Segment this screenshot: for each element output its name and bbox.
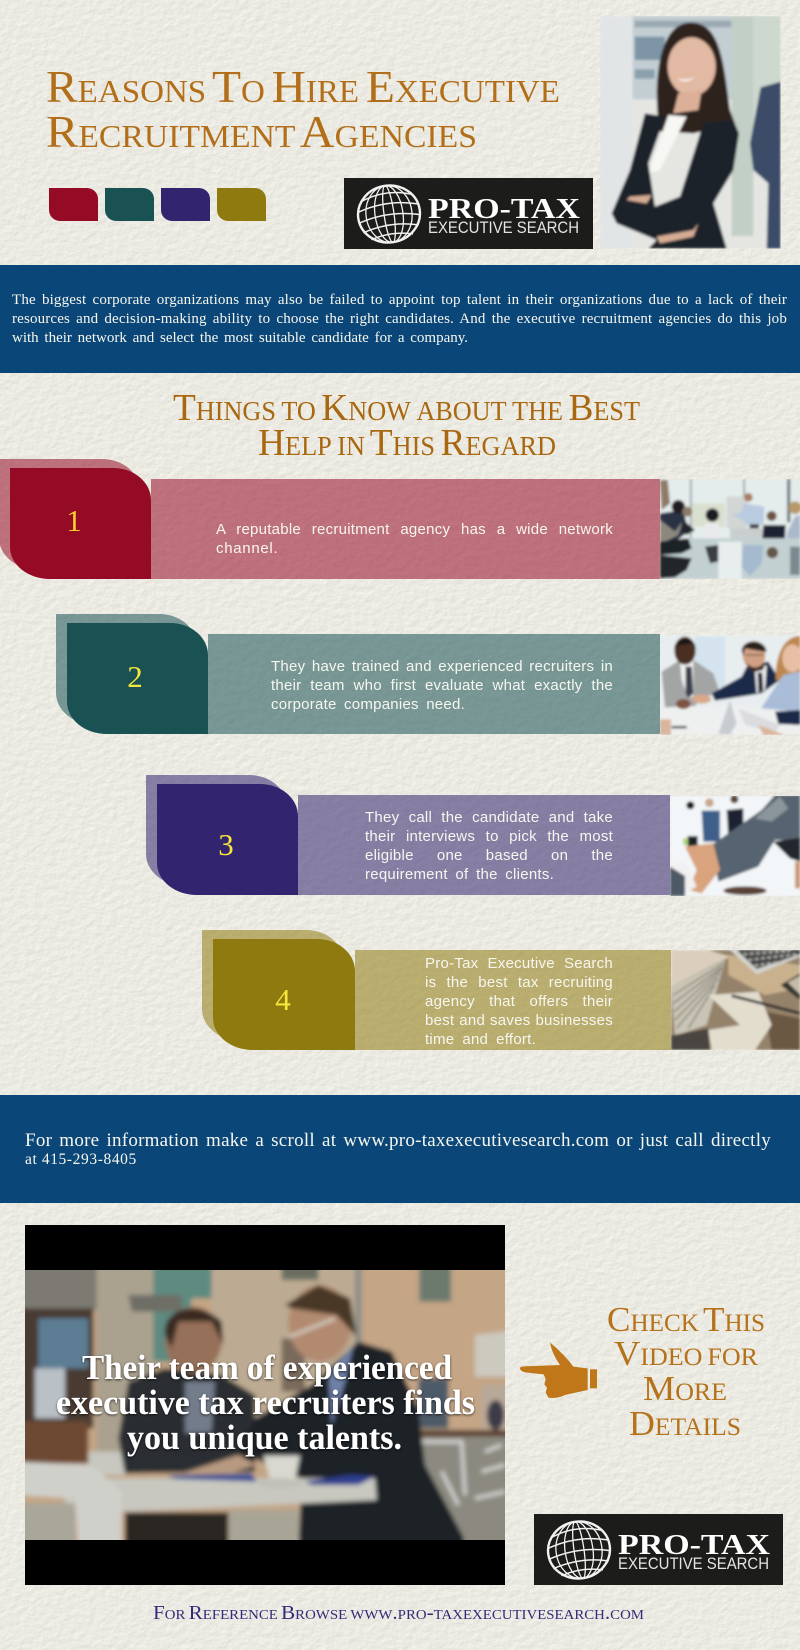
- row 3 text: eligible one based on the: [365, 847, 613, 864]
- row 1 text: channel.: [216, 540, 278, 557]
- title: [46, 61, 560, 157]
- intro text: resources and decision-making ability to choose the right candidates. And the executive recruitment agencies do this job: [12, 311, 787, 327]
- callout: check this video: Video for: [614, 1334, 758, 1373]
- row 4 text: [425, 955, 613, 1048]
- row 2 text: corporate companies need.: [271, 696, 465, 713]
- video still panel: [15, 1225, 515, 1585]
- row 2 panel: [56, 614, 660, 734]
- row 4 text: best and saves businesses: [425, 1012, 613, 1029]
- row 1 text: A reputable recruitment agency has a wide network: [216, 521, 613, 538]
- row 3 panel: [146, 775, 670, 895]
- intro text: with their network and select the most suitable candidate for a company.: [12, 330, 468, 346]
- logo: Pro-Tax Executive Search: [344, 178, 593, 249]
- title: Reasons To Hire Executive: [46, 61, 560, 112]
- row 3 text: [365, 809, 613, 883]
- row 4 text: agency that offers their: [425, 993, 613, 1010]
- number 3: 3: [218, 827, 234, 862]
- row 2 text: [271, 658, 613, 713]
- row 2 text: their team who first evaluate what exactly the: [271, 677, 613, 694]
- row 4 text: is the best tax recruiting: [425, 974, 613, 991]
- logo: Pro-Tax Executive Search footer: [534, 1514, 783, 1585]
- footer reference link: For Reference Browse www.pro-taxexecutivesearch.com: [153, 1602, 645, 1624]
- row 1 photo: meeting room: [660, 479, 800, 579]
- callout: check this video: Check This: [607, 1300, 765, 1339]
- number 1: 1: [66, 503, 82, 538]
- callout: check this video: [607, 1300, 765, 1443]
- intro text: The biggest corporate organizations may also be failed to appoint top talent in their organizations due to a lack of their: [12, 292, 787, 308]
- intro band: [0, 265, 800, 373]
- video caption: [56, 1348, 475, 1457]
- logo: Pro-Tax Executive Search: EXECUTIVE SEARCH: [428, 219, 579, 237]
- video caption: Their team of experienced: [82, 1348, 452, 1387]
- title: Recruitment Agencies: [46, 106, 477, 157]
- section heading: Help in This Regard: [258, 422, 556, 464]
- row 3 text: They call the candidate and take: [365, 809, 613, 826]
- logo: Pro-Tax Executive Search footer: EXECUTIVE SEARCH: [618, 1555, 769, 1573]
- intro text: [12, 292, 787, 346]
- row 4 text: time and effort.: [425, 1031, 536, 1048]
- row 4 panel: [202, 930, 671, 1050]
- video caption: you unique talents.: [127, 1418, 402, 1457]
- number 2: 2: [127, 659, 143, 694]
- contact text: [25, 1130, 771, 1168]
- icon: pointing hand: [520, 1342, 597, 1398]
- row 3 text: their interviews to pick the most: [365, 828, 613, 845]
- callout: check this video: Details: [629, 1404, 741, 1443]
- contact text: at 415-293-8405: [25, 1151, 137, 1168]
- row 4 text: Pro-Tax Executive Search: [425, 955, 613, 972]
- row 4 photo: calculator and papers: [671, 950, 800, 1050]
- logo: Pro-Tax Executive Search: PRO-TAX: [428, 194, 580, 225]
- row 2 photo: colleagues at table: [660, 635, 800, 735]
- row 2 text: They have trained and experienced recruiters in: [271, 658, 613, 675]
- contact band: [0, 1095, 800, 1203]
- callout: check this video: More: [643, 1369, 727, 1408]
- section heading: [173, 387, 640, 464]
- contact text: For more information make a scroll at www.pro-taxexecutivesearch.com or just call directly: [25, 1130, 771, 1151]
- photo: businesswoman: [600, 16, 781, 249]
- row 1 panel: [0, 459, 660, 579]
- section heading: Things to Know about the Best: [173, 387, 640, 429]
- number 4: 4: [275, 982, 291, 1017]
- video caption: executive tax recruiters finds: [56, 1383, 475, 1422]
- row 3 photo: handshake: [670, 795, 800, 896]
- colour swatches: [49, 188, 266, 221]
- row 3 text: requirement of the clients.: [365, 866, 554, 883]
- logo: Pro-Tax Executive Search footer: PRO-TAX: [618, 1530, 770, 1561]
- row 1 text: [216, 521, 613, 557]
